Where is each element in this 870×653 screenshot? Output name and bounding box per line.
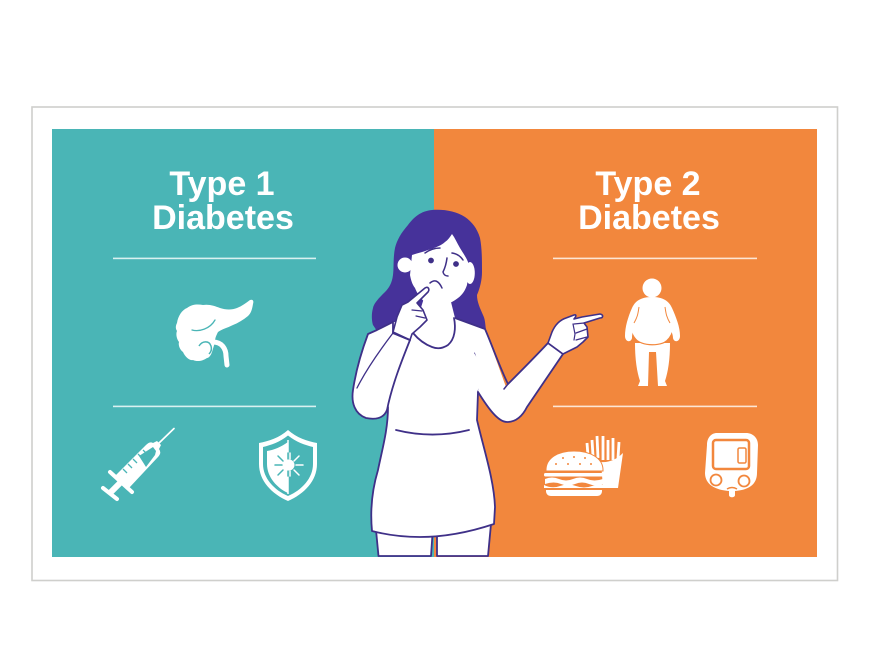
right arm <box>455 318 563 422</box>
icon: pancreas <box>176 300 253 365</box>
hair <box>372 210 486 331</box>
panel: Type 2 (orange) <box>434 129 817 557</box>
ears <box>398 258 412 272</box>
icon: overweight person <box>625 278 680 386</box>
heading: Type 1 Diabetes: Type 1 <box>169 165 275 203</box>
heading: Type 2 Diabetes: Diabetes <box>578 199 720 237</box>
heading: Type 2 Diabetes: Type 2 <box>595 165 701 203</box>
face <box>410 234 468 305</box>
dress and torso <box>371 318 495 537</box>
icon: glucose meter <box>705 433 758 497</box>
thinking hand <box>393 287 429 340</box>
panel: Type 1 (teal) <box>52 129 435 557</box>
left arm <box>353 322 410 419</box>
heading: Type 2 Diabetes <box>578 165 720 237</box>
pointing hand <box>548 314 603 354</box>
icon: burger and fries <box>544 436 623 496</box>
heading: Type 1 Diabetes: Diabetes <box>152 199 294 237</box>
legs <box>376 524 491 556</box>
heading: Type 1 Diabetes <box>152 165 294 237</box>
icon: syringe <box>103 428 174 499</box>
facial features <box>425 248 463 288</box>
neck and collar <box>413 298 455 348</box>
woman pointing illustration <box>353 210 603 556</box>
icon: shield with immune cell <box>259 430 317 501</box>
